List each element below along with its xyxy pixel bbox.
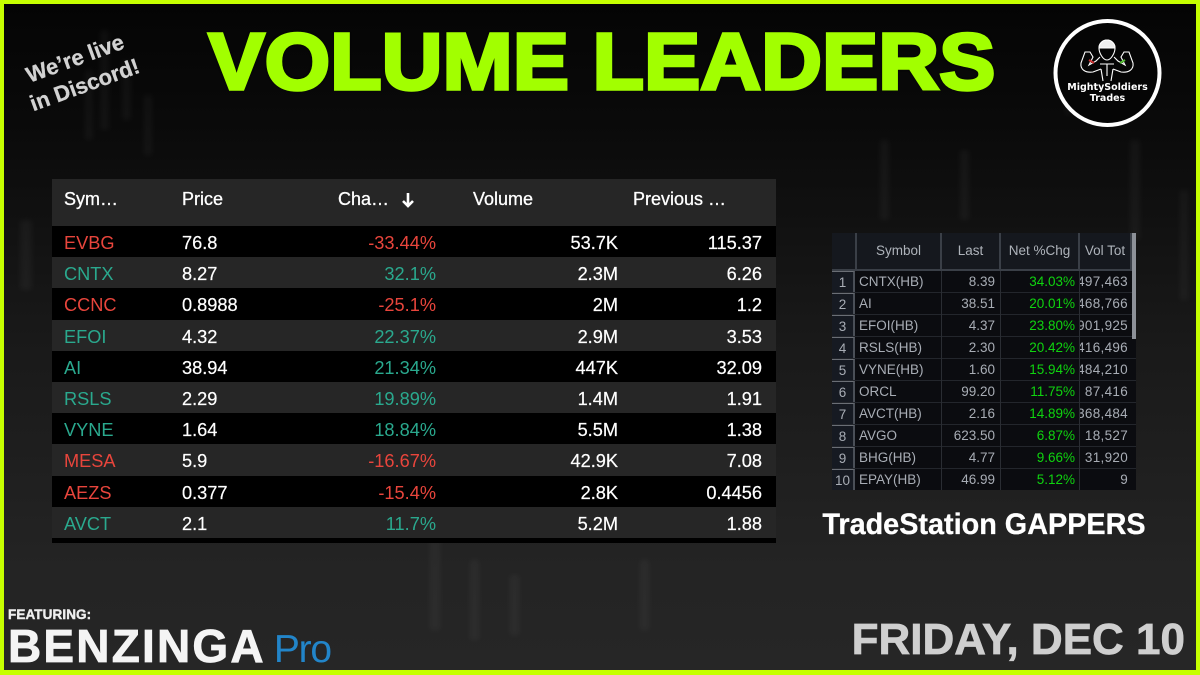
- row 9: 31,920: [1085, 450, 1128, 465]
- row: MESA: 42.9K: [570, 451, 618, 471]
- scrollbar: [1132, 233, 1136, 339]
- row: RSLS: 19.89%: [374, 389, 436, 409]
- icon: MightySoldiers Trades logo: Trades: [1090, 93, 1126, 104]
- table header: Symbol: [876, 243, 921, 258]
- table header: Net %Chg: [1009, 243, 1070, 258]
- row: MESA: MESA: [64, 451, 116, 471]
- row 2: 38.51: [961, 296, 995, 311]
- row: RSLS: 1.91: [727, 389, 762, 409]
- row: AEZS: 2.8K: [581, 483, 618, 503]
- table header: Sym…: [64, 189, 118, 209]
- caption: TradeStation GAPPERS: TradeStation GAPPERS: [822, 508, 1146, 541]
- row 5: 1.60: [969, 362, 995, 377]
- row 8: [832, 425, 1136, 447]
- row: MESA: -16.67%: [368, 451, 436, 471]
- row: RSLS: RSLS: [64, 389, 112, 409]
- row: EVBG: -33.44%: [368, 233, 436, 253]
- row: AVCT: 1.88: [727, 514, 762, 534]
- row: VYNE: 18.84%: [374, 420, 436, 440]
- row: EFOI: 22.37%: [374, 327, 436, 347]
- row: VYNE: 5.5M: [578, 420, 618, 440]
- row 7: [832, 403, 1136, 425]
- row 1: CNTX(HB): [859, 274, 924, 289]
- row: EVBG: 53.7K: [570, 233, 618, 253]
- row: CNTX: 8.27: [182, 264, 217, 284]
- row: AVCT: 5.2M: [578, 514, 618, 534]
- row: CNTX: 2.3M: [578, 264, 618, 284]
- table header: Volume: [473, 189, 533, 209]
- row: MESA: [52, 444, 776, 476]
- row: CCNC: 0.8988: [182, 295, 238, 315]
- row 3: 4.37: [969, 318, 995, 333]
- row: EVBG: 76.8: [182, 233, 217, 253]
- row: MESA: 7.08: [727, 451, 762, 471]
- row 4: 2.30: [969, 340, 995, 355]
- row: AVCT: [52, 507, 776, 538]
- row 8: 6.87%: [1037, 428, 1075, 443]
- row: CCNC: CCNC: [64, 295, 117, 315]
- row: VYNE: VYNE: [64, 420, 114, 440]
- row 6: [832, 381, 1136, 403]
- row 1: 1: [839, 275, 846, 290]
- row 9: 4.77: [969, 450, 995, 465]
- row: EFOI: EFOI: [64, 327, 106, 347]
- row 5: 15.94%: [1029, 362, 1075, 377]
- row: CNTX: 6.26: [727, 264, 762, 284]
- row: AEZS: 0.377: [182, 483, 228, 503]
- row: AVCT: AVCT: [64, 514, 111, 534]
- row: EFOI: 4.32: [182, 327, 217, 347]
- icon: MightySoldiers Trades logo: [1054, 19, 1162, 127]
- row 6: 99.20: [961, 384, 995, 399]
- row: EFOI: 3.53: [727, 327, 762, 347]
- row 2: [832, 293, 1136, 315]
- date: FRIDAY, DEC 10: [852, 615, 1185, 664]
- row: CCNC: [64, 295, 762, 315]
- row 2: AI: [859, 296, 872, 311]
- text: featuring label: FEATURING:: [8, 607, 91, 622]
- panel: Benzinga volume table: [52, 179, 776, 543]
- row 8: 18,527: [1085, 428, 1128, 443]
- row 8: AVGO: [859, 428, 897, 443]
- row 5: 5: [839, 363, 846, 378]
- row 10: EPAY(HB): [859, 472, 921, 487]
- row: AI: 447K: [576, 358, 618, 378]
- row 9: 9: [839, 451, 846, 466]
- row 4: RSLS(HB): [859, 340, 922, 355]
- row: CNTX: 32.1%: [384, 264, 436, 284]
- row: AI: [64, 358, 762, 378]
- row: VYNE: 1.64: [182, 420, 217, 440]
- row: AVCT: 2.1: [182, 514, 207, 534]
- row 6: ORCL: [859, 384, 897, 399]
- title: VOLUME LEADERS: [208, 17, 996, 106]
- panel: TradeStation gappers table: [832, 233, 1136, 490]
- row 10: 9: [1120, 472, 1128, 487]
- row: EFOI: 2.9M: [578, 327, 618, 347]
- row: VYNE: [64, 420, 762, 440]
- row 3: 23.80%: [1029, 318, 1075, 333]
- table header: Previous …: [633, 189, 726, 209]
- row: CCNC: 1.2: [737, 295, 762, 315]
- row 6: 6: [839, 385, 846, 400]
- row 7: 14.89%: [1029, 406, 1075, 421]
- row 2: 20.01%: [1029, 296, 1075, 311]
- table header: [832, 233, 1132, 271]
- row: AEZS: -15.4%: [378, 483, 436, 503]
- row 7: 7: [839, 407, 846, 422]
- row 3: EFOI(HB): [859, 318, 918, 333]
- row 6: 11.75%: [1030, 384, 1075, 399]
- row: AEZS: [64, 483, 762, 503]
- row 1: [832, 271, 1136, 293]
- icon: MightySoldiers Trades logo: MightySoldiers: [1067, 82, 1148, 93]
- row: EVBG: EVBG: [64, 233, 115, 253]
- row 9: 9.66%: [1037, 450, 1075, 465]
- row: CNTX: [52, 257, 776, 288]
- row 10: 46.99: [961, 472, 995, 487]
- row 3: [832, 315, 1136, 337]
- row: CCNC: -25.1%: [378, 295, 436, 315]
- row 10: 10: [835, 473, 850, 488]
- row 8: 623.50: [954, 428, 995, 443]
- row 6: 87,416: [1085, 384, 1128, 399]
- row: CNTX: CNTX: [64, 264, 114, 284]
- row: RSLS: [52, 382, 776, 413]
- row: EVBG: [64, 233, 762, 253]
- table header: [52, 179, 776, 226]
- row: AI: AI: [64, 358, 81, 378]
- row 1: 34.03%: [1029, 274, 1075, 289]
- callout: live in Discord: in Discord!: [26, 53, 143, 116]
- row 5: VYNE(HB): [859, 362, 924, 377]
- row 10: 5.12%: [1037, 472, 1075, 487]
- row 9: [832, 447, 1136, 469]
- row: AEZS: AEZS: [64, 483, 112, 503]
- table header: Vol Tot: [1085, 243, 1125, 258]
- callout: live in Discord: We’re live: [23, 29, 127, 88]
- row: RSLS: 1.4M: [578, 389, 618, 409]
- row: AVCT: 11.7%: [386, 514, 436, 534]
- row 7: AVCT(HB): [859, 406, 922, 421]
- row: VYNE: 1.38: [727, 420, 762, 440]
- row 10: [832, 469, 1128, 490]
- row 1: 8.39: [969, 274, 995, 289]
- row: AI: 38.94: [182, 358, 228, 378]
- row 2: 2: [839, 297, 846, 312]
- row 8: 8: [839, 429, 846, 444]
- row 5: [832, 359, 1136, 381]
- row: AEZS: 0.4456: [706, 483, 762, 503]
- row 4: [832, 337, 1136, 359]
- row 3: 3: [839, 319, 846, 334]
- table header: Cha…: [338, 189, 389, 209]
- row: MESA: 5.9: [182, 451, 207, 471]
- row: EFOI: [52, 320, 776, 351]
- row: AI: 21.34%: [374, 358, 436, 378]
- row: CCNC: 2M: [593, 295, 618, 315]
- row: EVBG: 115.37: [708, 233, 762, 253]
- row 7: 2.16: [969, 406, 995, 421]
- row: RSLS: 2.29: [182, 389, 217, 409]
- table header: Price: [182, 189, 223, 209]
- row 4: 20.42%: [1029, 340, 1075, 355]
- row 4: 4: [839, 341, 846, 356]
- logo: Benzinga Pro: BENZINGAPro: [8, 620, 331, 672]
- row: AI: 32.09: [716, 358, 762, 378]
- row 9: BHG(HB): [859, 450, 916, 465]
- table header: Last: [958, 243, 983, 258]
